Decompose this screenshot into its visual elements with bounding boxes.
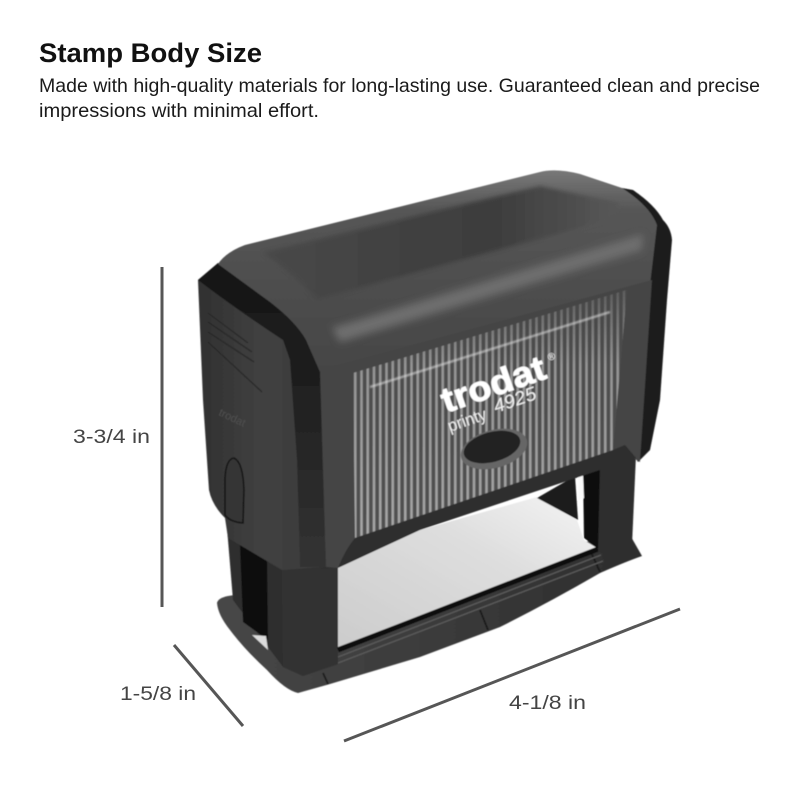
rib reflection line	[370, 312, 610, 387]
rib top shading	[353, 290, 627, 538]
right pillar	[578, 455, 636, 552]
description text: Made with high-quality materials for long-lasting use. Guaranteed clean and precise	[39, 76, 760, 97]
side vents	[208, 313, 262, 392]
stamp illustration	[198, 170, 672, 693]
front lower dark band	[338, 445, 636, 568]
printy model name: printy	[445, 405, 490, 436]
front face	[320, 280, 652, 568]
cap light stripe	[332, 234, 643, 342]
oval release button	[456, 422, 532, 476]
ribbed panel	[353, 290, 627, 538]
window with white insert	[338, 497, 597, 647]
depth dimension line	[174, 645, 243, 726]
rim highlights	[338, 555, 603, 663]
registered mark: ®	[546, 351, 558, 364]
window bottom rim	[338, 549, 598, 650]
model number: 4925	[491, 383, 540, 418]
top cap	[218, 170, 657, 372]
depth label: 1-5/8 in	[120, 683, 196, 705]
description text: impressions with minimal effort.	[39, 101, 319, 122]
width label: 4-1/8 in	[509, 692, 586, 714]
black corner band	[198, 263, 326, 567]
left leg	[226, 500, 338, 676]
height label: 3-3/4 in	[73, 426, 150, 448]
title: Stamp Body Size	[39, 38, 262, 68]
base plate	[217, 535, 642, 693]
window rear shadow	[537, 476, 578, 520]
side embossed mark: trodat	[217, 407, 247, 430]
trodat logo: trodat	[436, 348, 551, 421]
side button	[225, 458, 244, 523]
width dimension line	[344, 609, 680, 741]
right black side strip	[622, 188, 672, 462]
cap dark inset panel	[263, 186, 620, 300]
left side body	[198, 263, 326, 570]
height dimension line	[160, 267, 164, 607]
